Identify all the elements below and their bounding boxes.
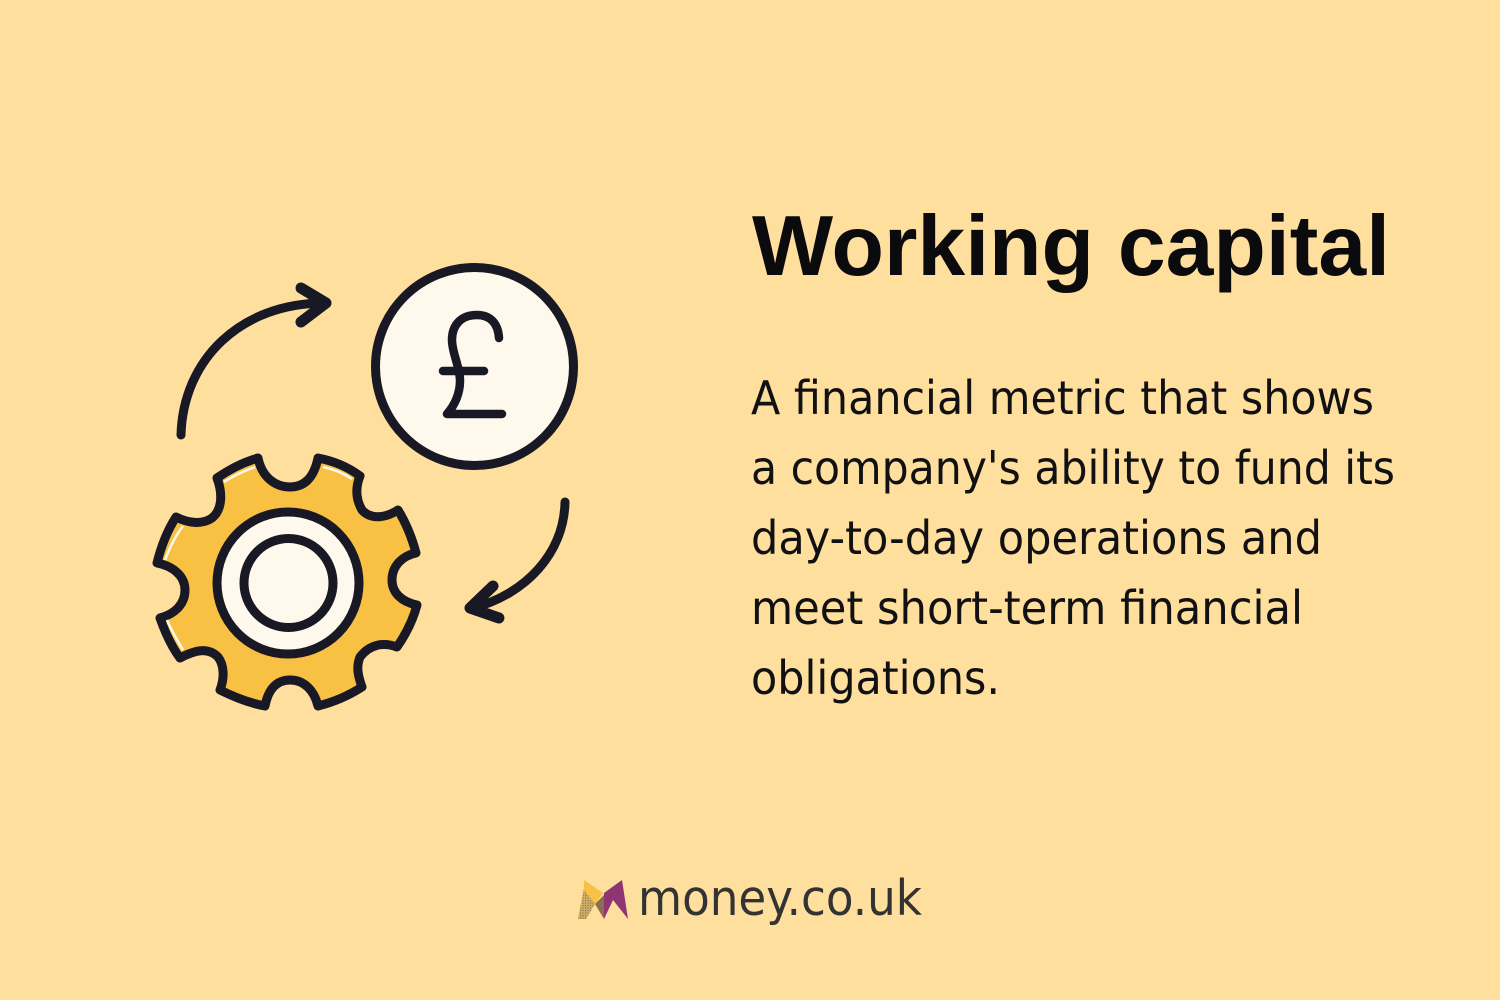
illustration: gear and pound coin cycle	[157, 268, 574, 706]
icon: pound coin	[376, 268, 574, 466]
description text: day-to-day operations and	[751, 511, 1322, 565]
description text	[751, 371, 1395, 705]
logo wordmark: money.co.uk	[638, 870, 923, 927]
icon: gear	[157, 458, 417, 706]
description text: obligations.	[751, 651, 1000, 705]
logo mark	[578, 880, 628, 919]
arrow: gear to coin	[181, 288, 326, 435]
description text: meet short-term financial	[751, 581, 1303, 635]
title: Working capital	[752, 199, 1390, 294]
gear highlights	[165, 467, 352, 650]
logo: money.co.uk	[578, 870, 923, 927]
gear inner ring	[244, 538, 333, 628]
description text: a company's ability to fund its	[751, 441, 1395, 495]
description text: A financial metric that shows	[751, 371, 1374, 425]
gear outer ring	[217, 512, 359, 654]
arrow: coin to gear	[470, 502, 565, 618]
